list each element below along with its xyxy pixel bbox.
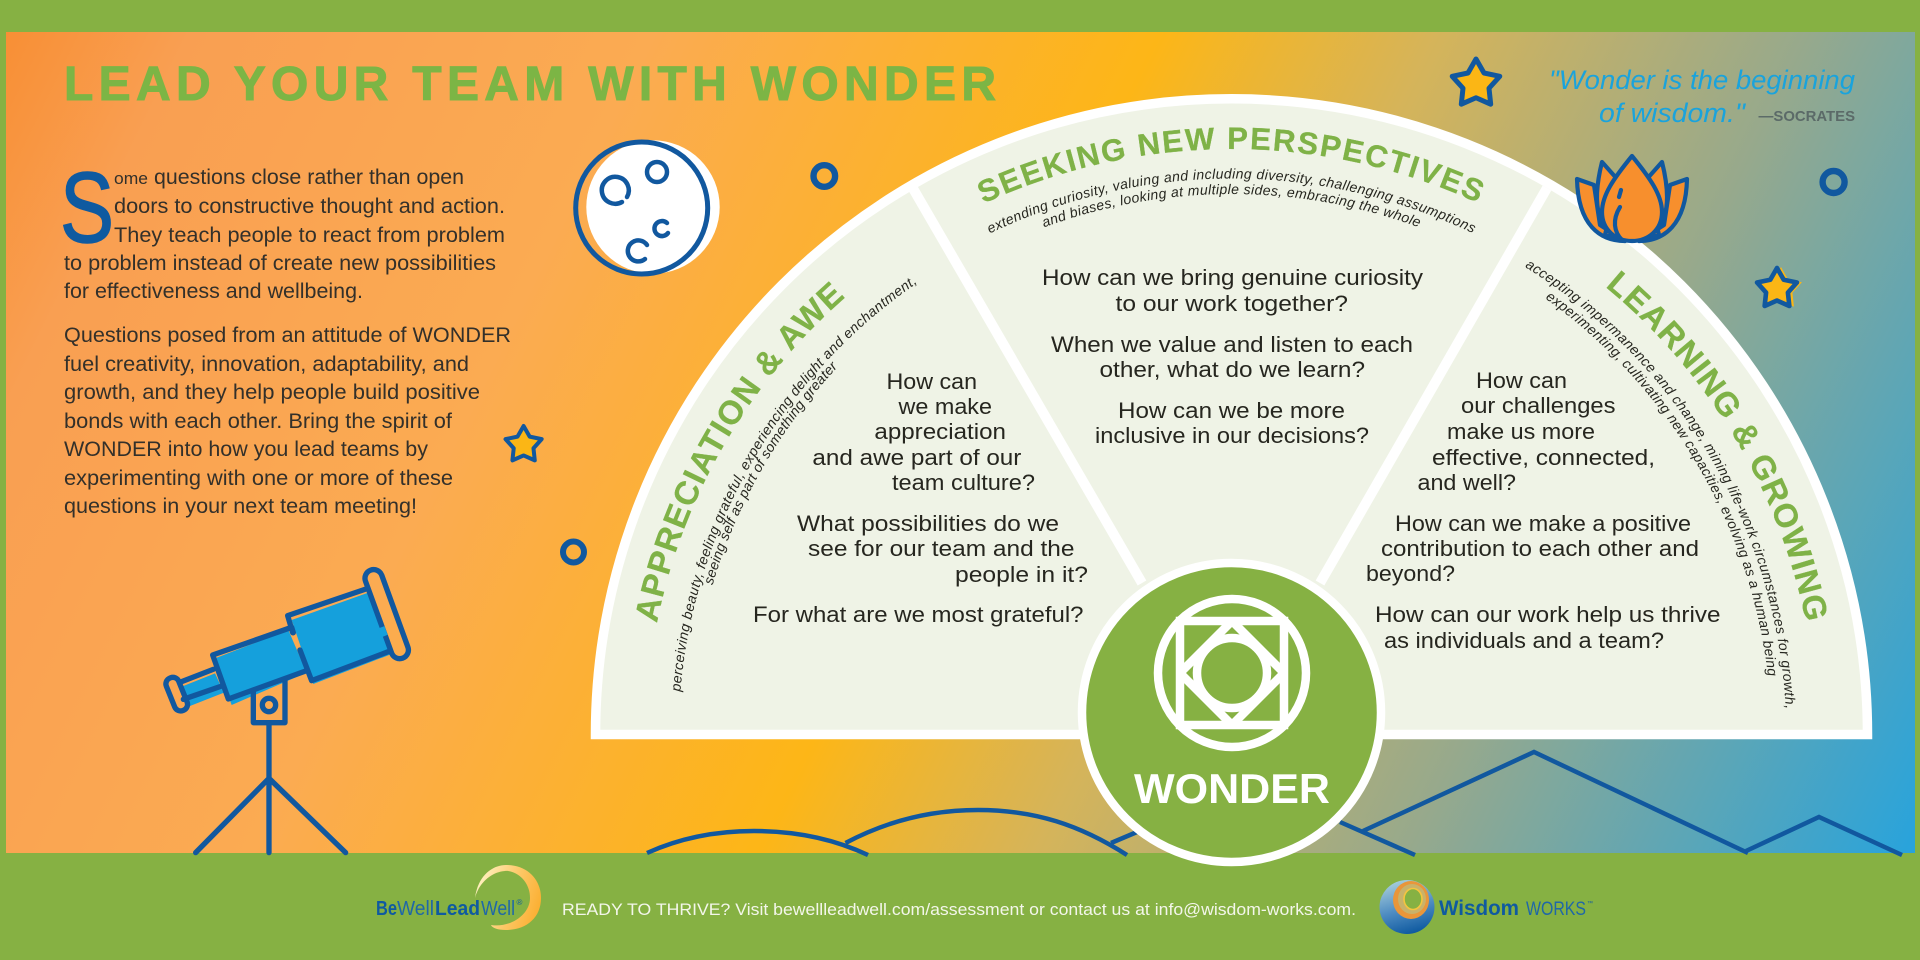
landscape: hills and mountains: [647, 752, 1902, 855]
questions: appreciation and awe: and awe part of our: [812, 445, 1021, 470]
questions: appreciation and awe: appreciation: [874, 419, 1006, 444]
questions: learning and growing: How can we make a positive: [1395, 511, 1691, 536]
title: LEAD YOUR TEAM WITH WONDER: [64, 58, 996, 111]
quote: Socrates: —SOCRATES: [1758, 108, 1855, 125]
icon: star right: [1757, 267, 1802, 307]
questions: appreciation and awe: How can: [886, 369, 977, 394]
panel: semicircle wheel: [596, 99, 1868, 734]
questions: seeking new perspectives: When we value and listen to each: [1051, 332, 1413, 357]
questions: seeking new perspectives: [1042, 265, 1423, 448]
questions: learning and growing: How can our work help us thrive: [1375, 602, 1720, 627]
questions: seeking new perspectives: How can we be more: [1118, 398, 1345, 423]
text block: introduction: ome: [114, 169, 148, 188]
icon: lotus: [1577, 156, 1687, 241]
questions: seeking new perspectives: inclusive in our decisions?: [1095, 423, 1369, 448]
questions: learning and growing: contribution to each other and: [1381, 536, 1699, 561]
logo: BeWellLeadWell: Lead: [435, 897, 480, 920]
heading: appreciation and awe: APPRECIATION & AWE: [636, 281, 845, 623]
logo: Wisdom Works: [1380, 880, 1593, 934]
text block: call to wonder: experimenting with one or more of these: [64, 467, 453, 490]
questions: appreciation and awe: For what are we most grateful?: [753, 602, 1084, 627]
text block: introduction: They teach people to react from problem: [114, 224, 505, 247]
icon: star top: [1452, 59, 1500, 104]
questions: seeking new perspectives: How can we bring genuine curiosity: [1042, 265, 1423, 290]
heading: seeking new perspectives: SEEKING NEW PERSPECTIVES: [978, 127, 1484, 202]
questions: learning and growing: [1366, 368, 1720, 653]
questions: seeking new perspectives: other, what do we learn?: [1100, 357, 1365, 382]
text block: call to wonder: bonds with each other. Bring the spirit of: [64, 410, 452, 433]
icon: small ring 3: [1823, 171, 1845, 193]
text block: call to wonder: fuel creativity, innovation, adaptability, and: [64, 353, 469, 376]
description: appreciation and awe: seeing self as part of something greater: [706, 362, 836, 585]
text block: introduction: questions close rather than open: [154, 166, 464, 189]
text block: call to wonder: growth, and they help people build positive: [64, 381, 480, 404]
segment: seeking new perspectives: [978, 127, 1484, 448]
questions: appreciation and awe: [753, 369, 1088, 627]
questions: learning and growing: make us more: [1447, 419, 1595, 444]
questions: learning and growing: our challenges: [1461, 393, 1616, 418]
icon: star left: [506, 426, 542, 460]
questions: appreciation and awe: see for our team and the: [808, 536, 1074, 561]
icon: small ring 2: [563, 542, 584, 562]
text block: introduction: S: [60, 152, 114, 264]
text block: introduction: for effectiveness and wellbeing.: [64, 280, 363, 303]
label: wonder: WONDER: [1134, 765, 1330, 812]
questions: appreciation and awe: people in it?: [955, 562, 1088, 587]
questions: learning and growing: How can: [1476, 368, 1567, 393]
icon: wonder symbol: [1158, 599, 1306, 747]
logo: Wisdom Works: WORKS: [1526, 899, 1586, 920]
segment: learning and growing: [1366, 262, 1826, 708]
questions: appreciation and awe: we make: [897, 394, 992, 419]
logo: BeWellLeadWell: Well: [481, 897, 515, 920]
questions: learning and growing: effective, connected,: [1432, 445, 1655, 470]
icon: small ring 1: [814, 165, 835, 187]
questions: appreciation and awe: team culture?: [892, 470, 1035, 495]
description: appreciation and awe: perceiving beauty, feeling grateful, experiencing delight and enchantment,: [673, 278, 916, 692]
quote: Socrates: [1549, 65, 1855, 128]
text block: call to wonder: [64, 324, 511, 518]
segment: appreciation and awe: [636, 278, 1088, 692]
questions: appreciation and awe: What possibilities do we: [797, 511, 1059, 536]
text block: introduction: [60, 152, 505, 303]
logo: BeWellLeadWell: Be: [376, 897, 397, 920]
description: seeking new perspectives: and biases, looking at multiple sides, embracing the whole: [1043, 184, 1420, 227]
description: learning and growing: accepting impermanence and change, mining life-work circumstances for growth,: [1526, 262, 1796, 708]
logo: Wisdom Works: ™: [1587, 900, 1593, 907]
questions: learning and growing: and well?: [1418, 470, 1516, 495]
logo: Wisdom Works: Wisdom: [1439, 897, 1519, 920]
logo: BeWellLeadWell: Well: [397, 897, 434, 920]
footer text: contact: READY TO THRIVE? Visit bewellleadwell.com/assessment or contact us at info@wisdom-works.com.: [562, 901, 1356, 919]
icon: moon: [576, 140, 720, 274]
questions: seeking new perspectives: to our work together?: [1116, 291, 1348, 316]
questions: learning and growing: as individuals and a team?: [1384, 628, 1664, 653]
badge: wonder: [1082, 563, 1381, 862]
quote: Socrates: "Wonder is the beginning: [1549, 65, 1855, 95]
description: seeking new perspectives: extending curiosity, valuing and including diversity, challenging assumptions: [988, 168, 1476, 232]
text block: introduction: doors to constructive thought and action.: [114, 195, 505, 218]
text block: call to wonder: Questions posed from an attitude of WONDER: [64, 324, 511, 347]
heading: learning and growing: LEARNING & GROWING: [1606, 270, 1826, 620]
quote: Socrates: of wisdom.": [1599, 98, 1746, 128]
text block: call to wonder: WONDER into how you lead teams by: [64, 438, 429, 461]
icon: telescope: [164, 567, 411, 853]
description: learning and growing: experimenting, cultivating new capacities, evolving as a human being: [1546, 294, 1776, 676]
text block: call to wonder: questions in your next team meeting!: [64, 495, 417, 518]
questions: learning and growing: beyond?: [1366, 561, 1455, 586]
logo: BeWellLeadWell: [376, 865, 541, 930]
text block: introduction: to problem instead of create new possibilities: [64, 252, 496, 275]
logo: BeWellLeadWell: ®: [516, 898, 522, 907]
